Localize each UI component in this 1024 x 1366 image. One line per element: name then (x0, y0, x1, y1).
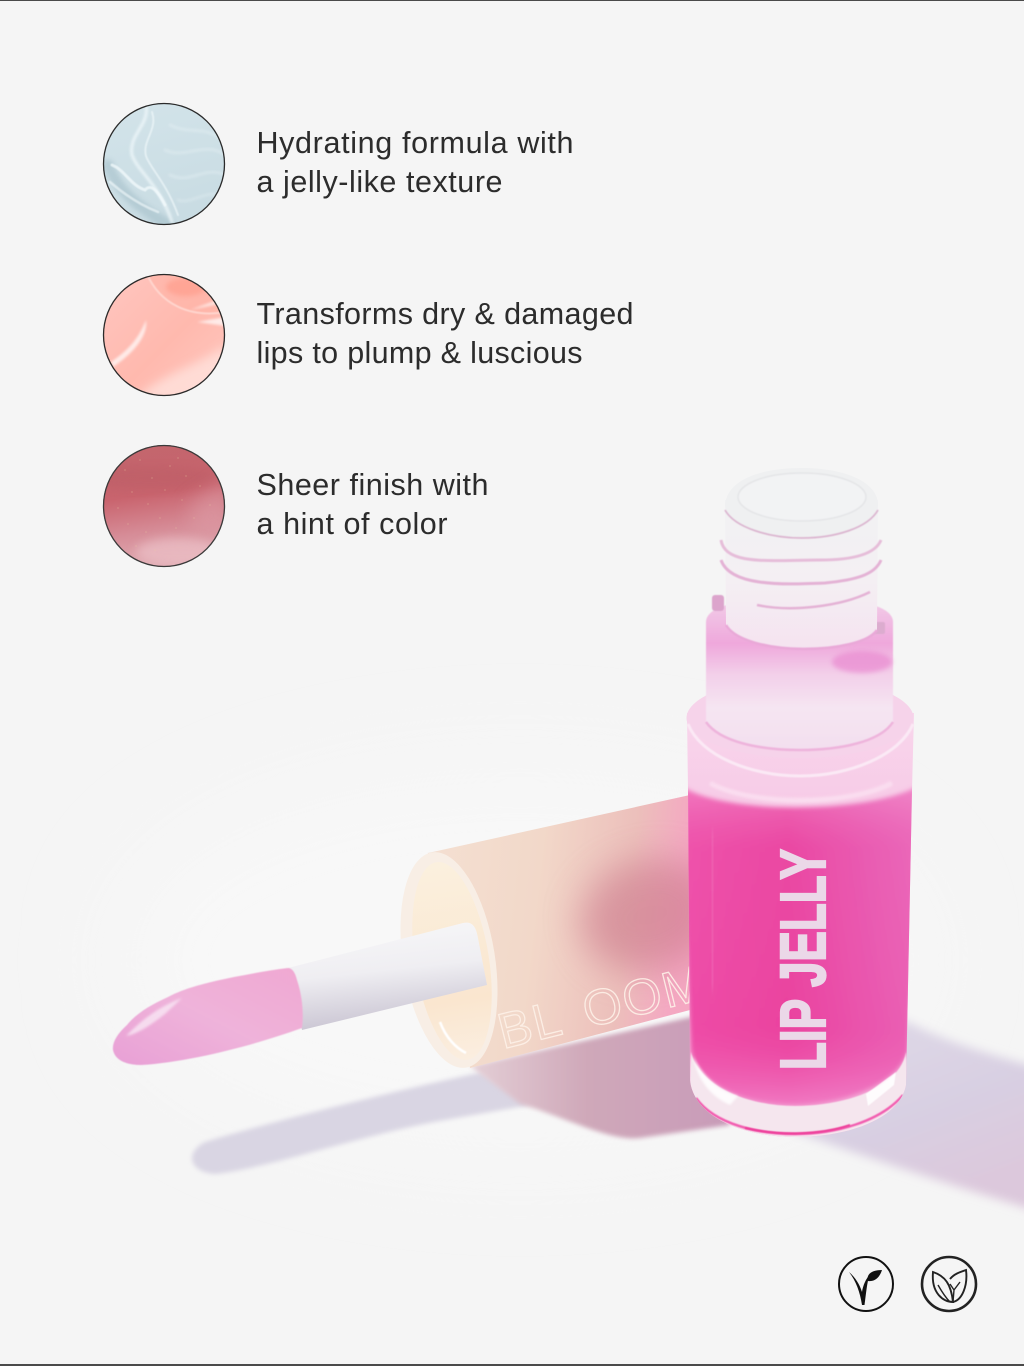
cap opening rim (387, 845, 511, 1075)
cap opening inner (400, 856, 504, 1066)
glass body (687, 713, 914, 1137)
icon: vegan (839, 1257, 893, 1311)
collar (706, 598, 893, 750)
cap shading (565, 845, 689, 984)
swatch: water texture (103, 103, 225, 226)
cap brand text: BLOOM (492, 954, 712, 1060)
wand stem (288, 923, 487, 1030)
glass base (688, 1052, 910, 1140)
neck threads (721, 500, 881, 649)
liquid (680, 783, 920, 1105)
product label: LIP JELLY: LIP JELLY (767, 849, 839, 1070)
neck lid (725, 468, 878, 538)
wand (113, 923, 487, 1065)
cap body (428, 795, 690, 1068)
shoulder ring (686, 678, 914, 776)
applicator highlight (126, 998, 182, 1036)
collar tabs (712, 595, 885, 634)
bottle (680, 468, 920, 1140)
text: sheer finish: a hint of color (256, 507, 448, 541)
text: transforms lips: Transforms dry & damaged (256, 297, 634, 331)
feature: sheer finish (80, 445, 488, 567)
text: hydrating formula: a jelly-like texture (256, 165, 502, 199)
icon: natural leaves (922, 1257, 976, 1311)
swatch: peach gel (103, 270, 226, 400)
text: transforms lips: lips to plump & luscious (256, 336, 582, 370)
cap inner highlight (440, 1022, 466, 1053)
applicator tip (113, 968, 303, 1065)
text: sheer finish: Sheer finish with (256, 468, 488, 502)
swatch: sheer shimmer (102, 444, 226, 568)
product shadows (192, 1015, 1024, 1212)
text: hydrating formula: Hydrating formula with (256, 126, 574, 160)
cap (400, 796, 690, 1068)
feature: plump lips (103, 270, 634, 400)
feature: hydrating formula (103, 103, 574, 226)
